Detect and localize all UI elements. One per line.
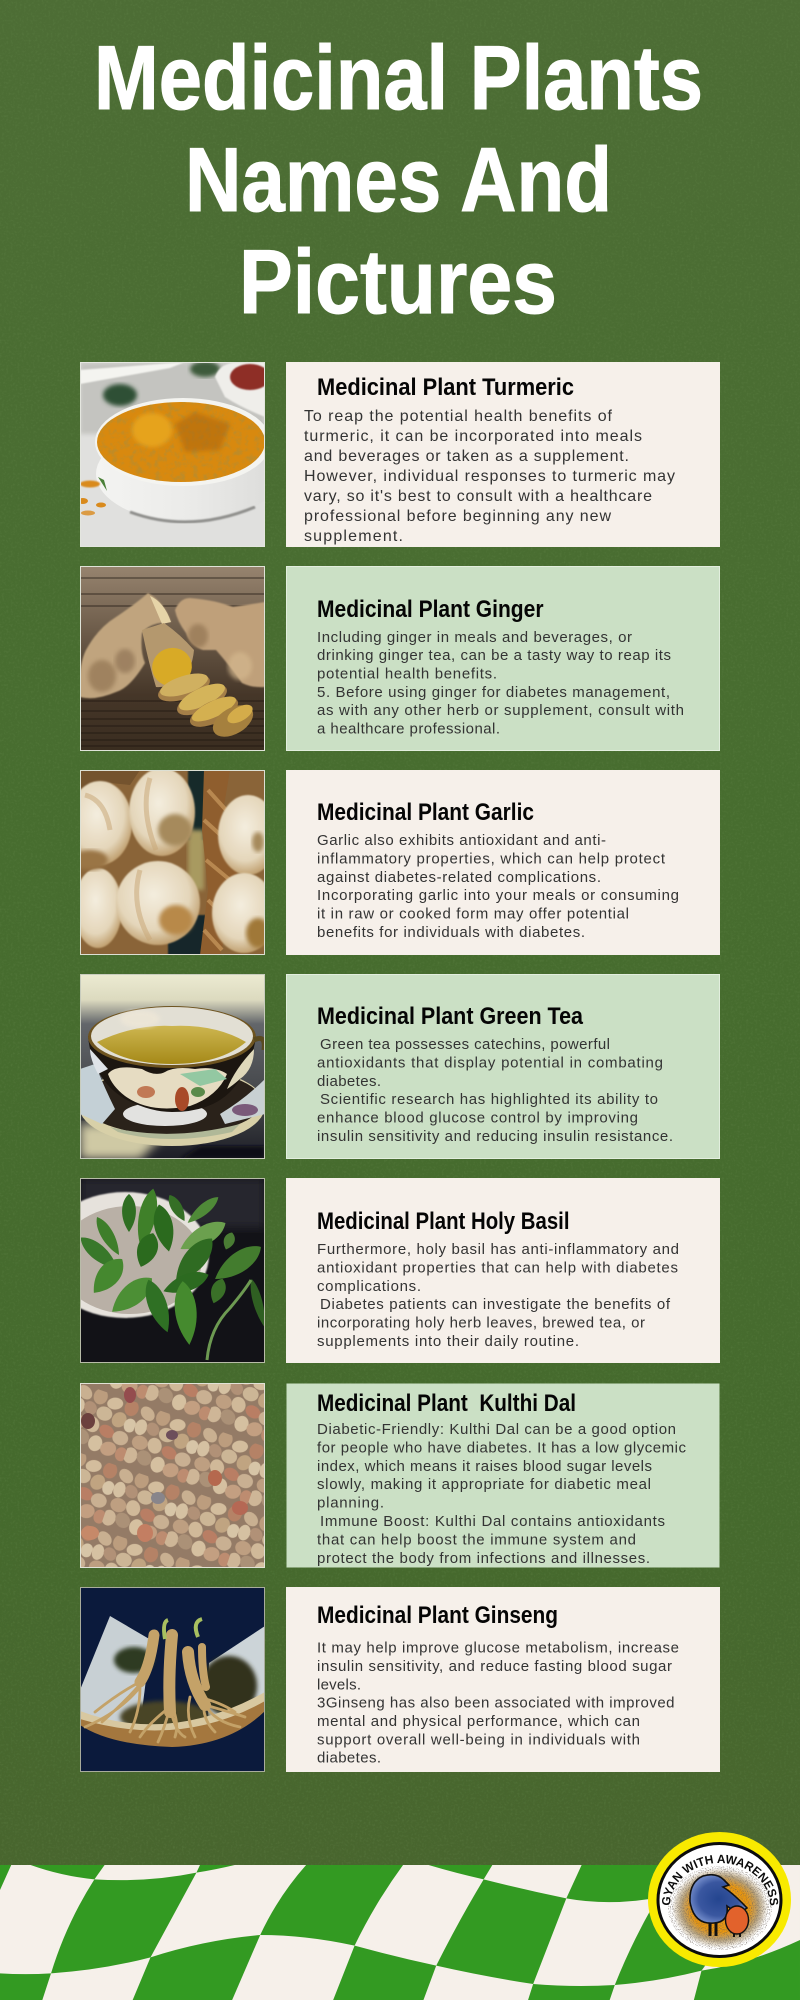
logo badge: Gyan With Awareness — [648, 1832, 791, 1967]
panel: green tea text — [286, 974, 720, 1158]
row: kulthi dal — [80, 1383, 720, 1568]
panel: ginseng text: 3Ginseng has also been associated with improved — [317, 1695, 674, 1712]
row: turmeric — [78, 361, 720, 547]
panel: turmeric text: To reap the potential health benefits of — [304, 408, 613, 425]
row: ginger — [80, 566, 720, 751]
panel: turmeric text: Medicinal Plant Turmeric — [317, 374, 574, 401]
row: garlic — [68, 768, 720, 955]
row: holy basil — [41, 1178, 720, 1363]
photo: garlic bulbs — [80, 770, 265, 955]
panel: ginseng text: It may help improve glucose metabolism, increase — [317, 1640, 679, 1657]
panel: kulthi dal text: Diabetic-Friendly: Kulthi Dal can be a good option — [317, 1421, 676, 1438]
badge ring text: GYAN WITH AWARENESS — [662, 1854, 778, 1906]
panel: garlic text: against diabetes-related complications. — [317, 869, 601, 886]
panel: ginseng text: insulin sensitivity, and reduce fasting blood sugar — [317, 1658, 672, 1675]
title: Pictures — [239, 232, 557, 333]
panel: turmeric text: and beverages or taken as a supplement. — [304, 448, 629, 465]
panel: holy basil text: Medicinal Plant Holy Basil — [317, 1208, 570, 1235]
panel: green tea text: enhance blood glucose control by improving — [317, 1110, 638, 1127]
panel: holy basil text: Furthermore, holy basil has anti-inflammatory and — [317, 1241, 679, 1258]
panel: turmeric text — [286, 362, 720, 547]
panel: green tea text: diabetes. — [317, 1073, 381, 1090]
panel: ginseng text: mental and physical performance, which can — [317, 1713, 640, 1730]
photo: ginseng roots — [80, 1587, 265, 1772]
panel: holy basil text: antioxidant properties that can help with diabetes — [317, 1259, 678, 1276]
panel: ginseng text: diabetes. — [317, 1750, 381, 1767]
panel: green tea text: insulin sensitivity and reducing insulin resistance. — [317, 1128, 673, 1145]
panel: turmeric text: professional before beginning any new — [304, 508, 611, 525]
photo: green tea cup — [80, 974, 265, 1159]
panel: green tea text: Medicinal Plant Green Tea — [317, 1003, 584, 1030]
panel: kulthi dal text — [286, 1384, 720, 1568]
panel: ginger text: drinking ginger tea, can be a tasty way to reap its — [317, 647, 671, 664]
panel: garlic text: benefits for individuals with diabetes. — [317, 924, 585, 941]
panel: garlic text: Incorporating garlic into your meals or consuming — [317, 887, 679, 904]
panel: ginger text: 5. Before using ginger for diabetes management, — [317, 684, 670, 701]
panel: garlic text — [286, 770, 720, 955]
row: green tea — [79, 974, 720, 1159]
panel: kulthi dal text: planning. — [317, 1495, 384, 1512]
title: Medicinal Plants — [94, 28, 703, 129]
panel: green tea text: Scientific research has highlighted its ability to — [320, 1091, 658, 1108]
icon: chick legs — [734, 1932, 740, 1937]
title — [94, 28, 703, 333]
panel: ginger text — [286, 566, 720, 750]
panel: kulthi dal text: that can help boost the immune system and — [317, 1531, 636, 1548]
panel: kulthi dal text: Medicinal Plant Kulthi Dal — [317, 1390, 576, 1417]
panel: ginseng text: levels. — [317, 1676, 361, 1693]
photo: ginger root — [80, 566, 265, 751]
panel: ginseng text: Medicinal Plant Ginseng — [317, 1602, 558, 1629]
title: Names And — [185, 130, 612, 231]
icon: orange chick — [726, 1906, 748, 1934]
icon: blue bird — [690, 1875, 747, 1923]
panel: ginger text: Including ginger in meals and beverages, or — [317, 629, 632, 646]
panel: ginger text: Medicinal Plant Ginger — [317, 596, 544, 623]
panel: ginseng text: support overall well-being in individuals with — [317, 1731, 640, 1748]
panel: kulthi dal text: index, which means it raises blood sugar levels — [317, 1458, 652, 1475]
panel: ginger text: a healthcare professional. — [317, 720, 500, 738]
panel: holy basil text — [286, 1178, 720, 1363]
photo: holy basil leaves — [80, 1178, 265, 1363]
panel: green tea text: Green tea possesses catechins, powerful — [320, 1036, 610, 1053]
panel: garlic text: it in raw or cooked form may offer potential — [317, 906, 629, 923]
row: ginseng — [80, 1587, 720, 1772]
panel: ginger text: as with any other herb or supplement, consult with — [317, 702, 684, 719]
panel: garlic text: Medicinal Plant Garlic — [317, 799, 534, 826]
panel: turmeric text: turmeric, it can be incorporated into meals — [304, 428, 642, 445]
icon: bird legs — [710, 1922, 716, 1936]
panel: ginseng text — [286, 1587, 720, 1772]
panel: turmeric text: However, individual responses to turmeric may — [304, 468, 675, 485]
panel: garlic text: inflammatory properties, which can help protect — [317, 850, 666, 867]
panel: kulthi dal text: slowly, making it appropriate for diabetic meal — [317, 1476, 651, 1493]
panel: kulthi dal text: for people who have diabetes. It has a low glycemic — [317, 1439, 686, 1456]
panel: holy basil text: Diabetes patients can investigate the benefits of — [320, 1296, 671, 1313]
photo: turmeric bowl — [80, 362, 265, 547]
panel: holy basil text: complications. — [317, 1278, 421, 1295]
panel: ginger text: potential health benefits. — [317, 665, 497, 682]
panel: kulthi dal text: protect the body from infections and illnesses. — [317, 1550, 650, 1567]
footer: wavy green and cream checkerboard — [0, 1865, 800, 2000]
panel: green tea text: antioxidants that display potential in combating — [317, 1054, 663, 1071]
panel: turmeric text: vary, so it's best to consult with a healthcare — [304, 488, 652, 505]
panel: kulthi dal text: Immune Boost: Kulthi Dal contains antioxidants — [320, 1513, 665, 1530]
panel: garlic text: Garlic also exhibits antioxidant and anti- — [317, 832, 606, 849]
panel: holy basil text: supplements into their daily routine. — [317, 1333, 579, 1350]
photo: kulthi dal beans — [80, 1383, 265, 1568]
panel: turmeric text: supplement. — [304, 528, 403, 545]
panel: holy basil text: incorporating holy herb leaves, brewed tea, or — [317, 1315, 645, 1332]
